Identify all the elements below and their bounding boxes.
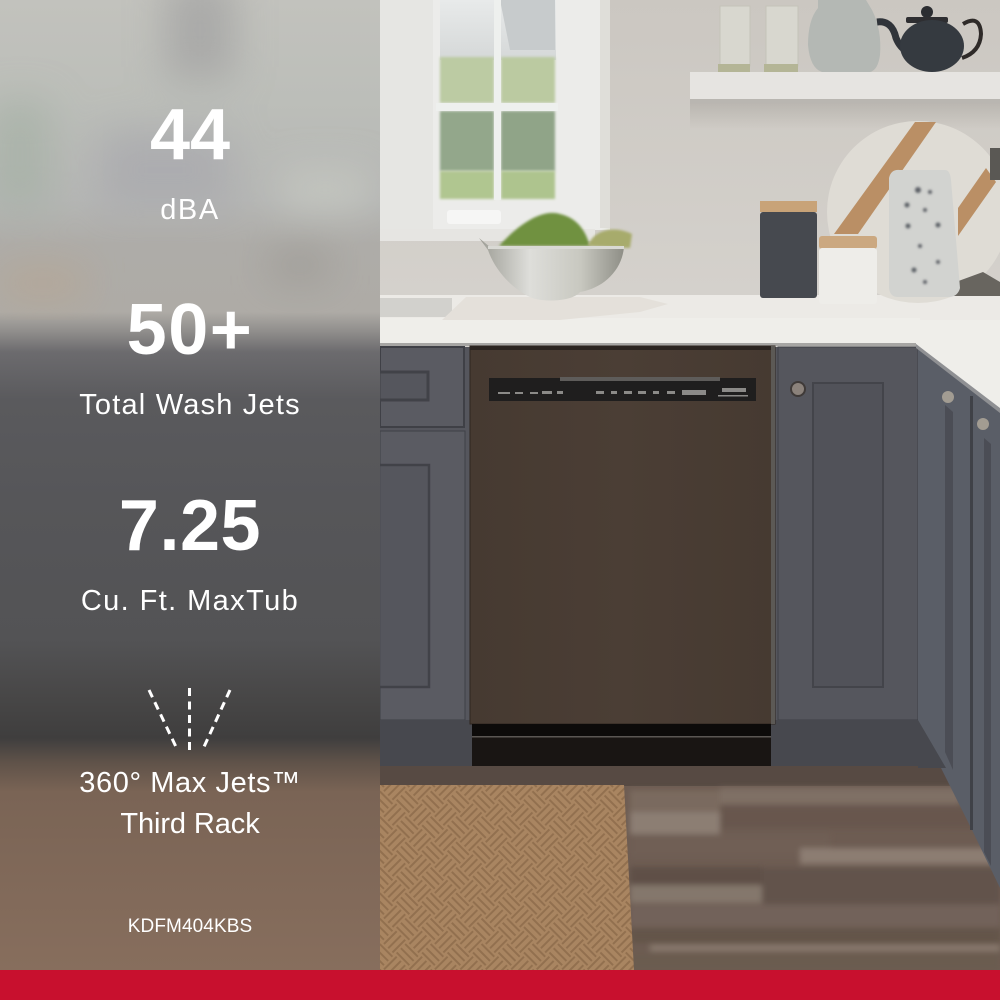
cabinet knob bbox=[791, 382, 805, 396]
label: 360 max jets third rack bbox=[79, 767, 301, 840]
stat: 7.25 cu ft bbox=[81, 486, 299, 617]
countertop bbox=[380, 295, 1000, 408]
label: 360 max jets third rack: Third Rack bbox=[120, 808, 260, 840]
label: cu ft maxtub: Cu. Ft. MaxTub bbox=[81, 585, 299, 617]
shelf with glasses, jug and teapot bbox=[690, 0, 1000, 129]
left panel: frosted gradient bbox=[0, 0, 380, 970]
red footer bar bbox=[0, 970, 1000, 1000]
number: 44: 44 bbox=[150, 95, 230, 175]
control panel bbox=[489, 377, 756, 401]
model number: KDFM404KBS bbox=[128, 916, 252, 937]
wood floor bbox=[380, 766, 1000, 971]
icon: spray jets bbox=[148, 688, 232, 750]
dishwasher bbox=[470, 346, 775, 766]
salad bowl bbox=[442, 213, 668, 320]
side cabinets bbox=[916, 344, 1000, 888]
window bbox=[380, 0, 610, 241]
left panel: blurred photo shapes bbox=[0, 0, 358, 296]
cutting boards and canisters bbox=[760, 121, 1000, 304]
label: total wash jets: Total Wash Jets bbox=[79, 389, 301, 421]
label: 360 max jets third rack: 360° Max Jets™ bbox=[79, 767, 301, 799]
number: 7.25: 7.25 bbox=[119, 486, 261, 566]
stat: 44 dBA bbox=[150, 95, 230, 226]
stat: 50+ total wash jets bbox=[79, 290, 301, 421]
rug bbox=[380, 785, 634, 970]
number: 50+: 50+ bbox=[127, 290, 253, 370]
lower cabinets bbox=[379, 347, 920, 768]
label: dBA: dBA bbox=[160, 194, 220, 226]
